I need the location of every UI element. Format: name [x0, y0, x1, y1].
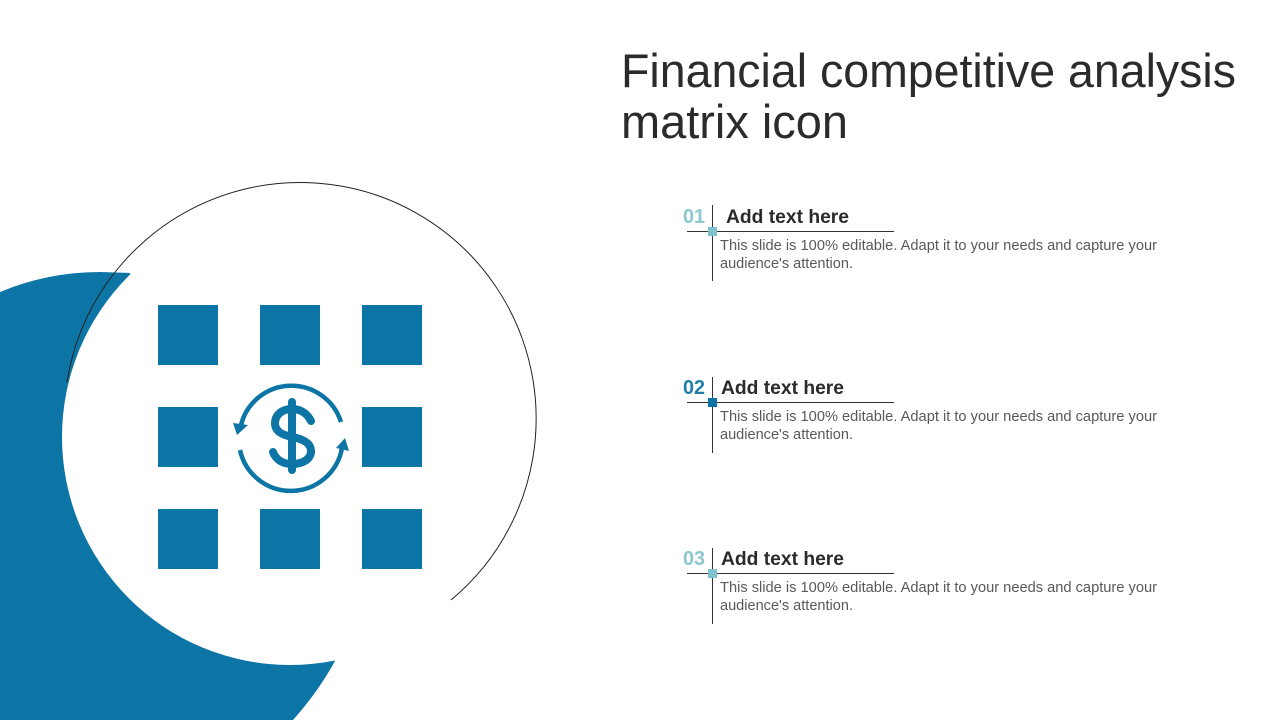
- number 03: 03: [683, 548, 705, 570]
- heading 03: Add text here: [721, 549, 844, 570]
- body 01: audience's attention.: [720, 256, 853, 272]
- item 03: [683, 548, 1157, 624]
- marker 02: [708, 398, 717, 407]
- body 03: This slide is 100% editable. Adapt it to your needs and capture your: [720, 580, 1157, 596]
- number 02: 02: [683, 377, 705, 399]
- marker 03: [708, 569, 717, 578]
- item 01: [683, 205, 1157, 281]
- title: [621, 44, 1236, 148]
- icon: matrix of squares with dollar sign: [158, 305, 422, 569]
- blue crescent background: [0, 209, 518, 720]
- title: matrix icon: [621, 95, 848, 148]
- heading 01: Add text here: [726, 207, 849, 228]
- thin circle outline: [67, 182, 536, 600]
- body 02: audience's attention.: [720, 427, 853, 443]
- item 02: [683, 377, 1157, 453]
- body 01: This slide is 100% editable. Adapt it to your needs and capture your: [720, 238, 1157, 254]
- number 01: 01: [683, 206, 705, 228]
- body 03: audience's attention.: [720, 598, 853, 614]
- marker 01: [708, 227, 717, 236]
- body 01: [720, 238, 1157, 272]
- body 02: [720, 409, 1157, 443]
- heading 02: Add text here: [721, 378, 844, 399]
- body 02: This slide is 100% editable. Adapt it to your needs and capture your: [720, 409, 1157, 425]
- icon: dollar sign: [273, 402, 311, 470]
- body 03: [720, 580, 1157, 614]
- title: Financial competitive analysis: [621, 44, 1236, 97]
- icon: circular arrows: [233, 386, 349, 491]
- matrix squares: [158, 305, 422, 569]
